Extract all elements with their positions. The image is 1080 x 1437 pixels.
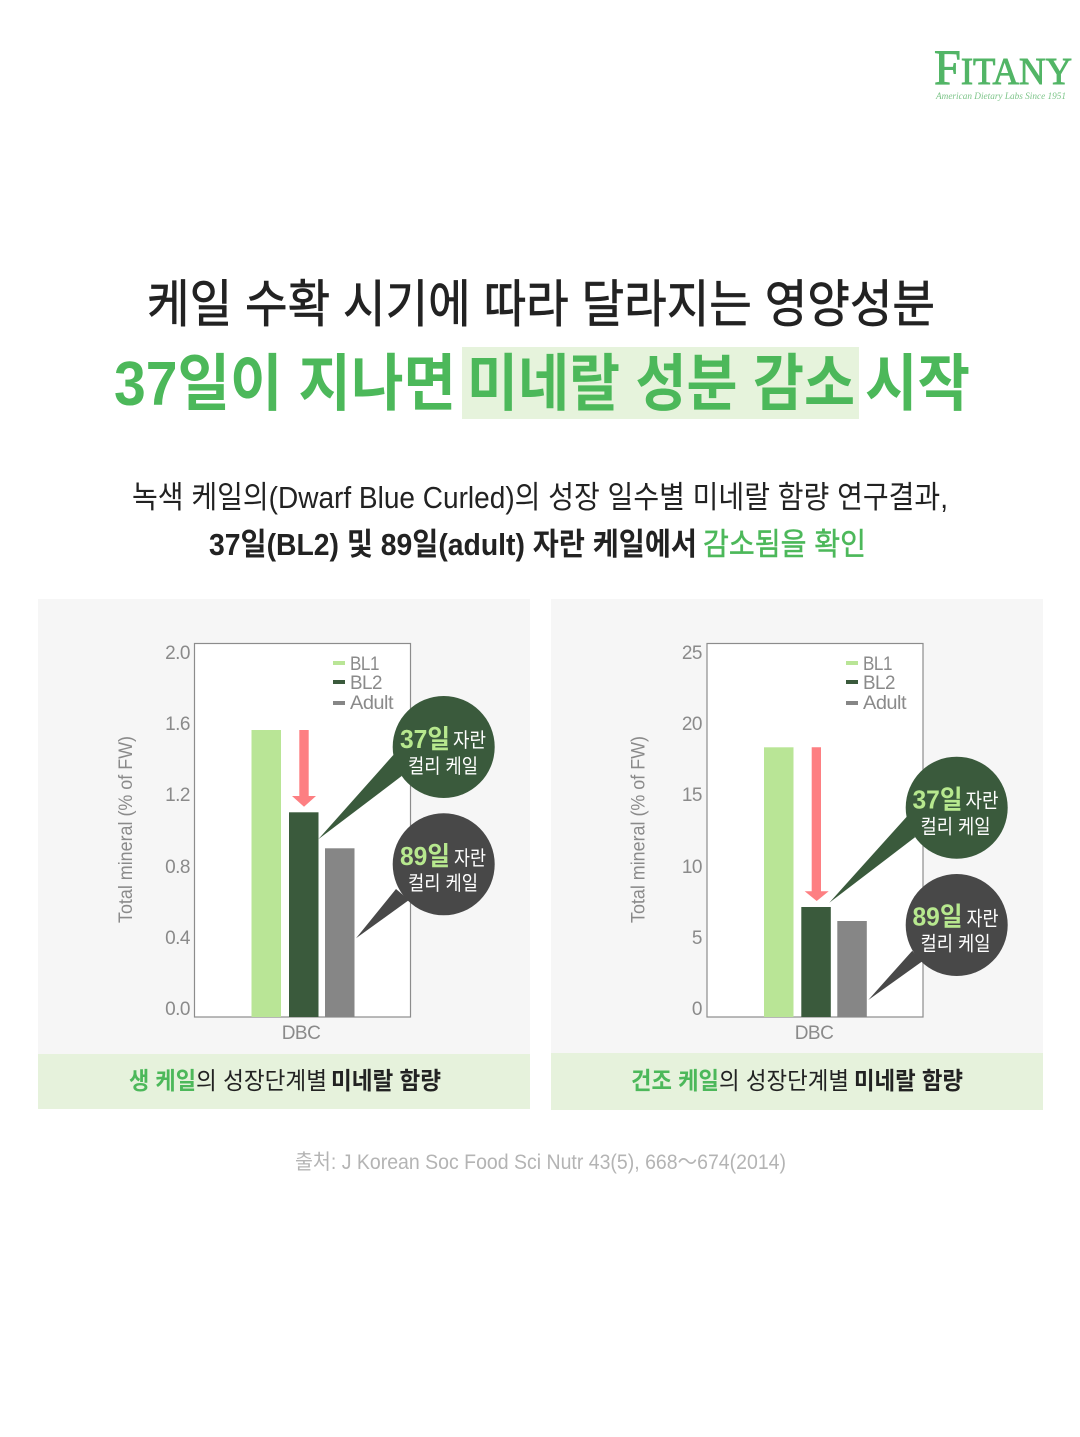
callout: 37 days xyxy=(318,696,495,839)
title line 2 with highlight: 37일이 지나면 xyxy=(114,350,456,419)
y axis ticks: 15 xyxy=(682,785,702,806)
y axis ticks: 0.0 xyxy=(165,999,190,1020)
y axis ticks: 0 xyxy=(692,999,702,1020)
caption: dried kale xyxy=(551,1053,1043,1110)
x axis label: DBC xyxy=(795,1023,833,1044)
chart frame xyxy=(194,644,410,1017)
y axis ticks: 25 xyxy=(682,643,702,664)
panel: fresh kale mineral chart xyxy=(38,599,530,1109)
arrow: decrease xyxy=(805,747,829,901)
y axis title: Total mineral (% of FW) xyxy=(628,736,650,923)
bar: BL1 xyxy=(252,730,281,1017)
y axis ticks: 20 xyxy=(682,714,702,735)
y axis title: Total mineral (% of FW) xyxy=(116,736,137,923)
legend: BL1 xyxy=(863,654,892,675)
caption: dried kale: 미네랄 함량 xyxy=(854,1068,963,1095)
chart frame xyxy=(707,644,923,1017)
source note: 출처: J Korean Soc Food Sci Nutr 43(5), 668～674(2014) xyxy=(295,1151,786,1174)
callout: 89 days: 자란 xyxy=(966,908,998,931)
y axis ticks: 0.8 xyxy=(165,857,190,878)
caption: dried kale: 의 성장단계별 xyxy=(719,1068,849,1095)
legend xyxy=(846,654,907,714)
caption: fresh kale: 의 성장단계별 xyxy=(196,1068,327,1095)
callout: 89 days: 컬리 케일 xyxy=(920,933,990,956)
bar: Adult xyxy=(837,921,867,1017)
caption: fresh kale: 생 케일 xyxy=(129,1068,196,1095)
callout: 89 days xyxy=(356,813,495,938)
y axis ticks xyxy=(682,643,702,1020)
callout: 89 days: 89일 xyxy=(912,902,962,932)
description line 2: 감소됨을 확인 xyxy=(703,527,866,562)
x axis label: DBC xyxy=(282,1023,320,1044)
legend: Adult xyxy=(863,693,907,714)
callout: 89 days: 89일 xyxy=(400,841,450,871)
callout: 89 days: 자란 xyxy=(454,847,486,870)
title line 2 with highlight: 시작 xyxy=(865,350,970,419)
callout: 37 days: 37일 xyxy=(912,785,962,815)
description line 2: 37일(BL2) 및 89일(adult) 자란 케일에서 xyxy=(209,527,697,562)
callout: 37 days: 자란 xyxy=(453,729,486,752)
caption: dried kale: 건조 케일 xyxy=(631,1068,719,1095)
legend: BL1 xyxy=(350,654,379,675)
description line 1: 녹색 케일의(Dwarf Blue Curled)의 성장 일수별 미네랄 함량 연구결과, xyxy=(132,480,948,515)
legend: BL2 xyxy=(863,673,895,694)
y axis ticks: 1.2 xyxy=(165,785,190,806)
callout: 37 days: 컬리 케일 xyxy=(408,755,478,778)
title line 1: 케일 수확 시기에 따라 달라지는 영양성분 xyxy=(147,276,935,333)
callout: 89 days: 컬리 케일 xyxy=(408,872,478,895)
legend: BL2 xyxy=(350,673,382,694)
callout: 37 days: 37일 xyxy=(400,724,450,754)
title line 2 with highlight: 미네랄 성분 감소 xyxy=(467,350,855,419)
logo: Fitany: American Dietary Labs Since 1951 xyxy=(935,92,1066,102)
y axis ticks: 0.4 xyxy=(165,928,191,949)
y axis ticks xyxy=(165,643,191,1020)
y axis ticks: 1.6 xyxy=(165,714,190,735)
bar: BL1 xyxy=(764,747,794,1017)
callout: 37 days: 자란 xyxy=(966,790,998,813)
caption: fresh kale: 미네랄 함량 xyxy=(331,1068,441,1095)
title line 2 with highlight xyxy=(114,347,970,419)
logo: Fitany: FITANY xyxy=(934,39,1072,95)
legend xyxy=(333,654,394,714)
bar: BL2 xyxy=(289,812,318,1017)
y axis ticks: 5 xyxy=(692,928,702,949)
legend: Adult xyxy=(350,693,394,714)
y axis ticks: 10 xyxy=(682,857,702,878)
caption: fresh kale xyxy=(38,1054,530,1109)
callout: 37 days: 컬리 케일 xyxy=(920,816,990,839)
y axis ticks: 2.0 xyxy=(165,643,190,664)
bar: Adult xyxy=(325,848,354,1017)
panel: dried kale mineral chart xyxy=(551,599,1043,1110)
bar: BL2 xyxy=(801,907,831,1017)
callout: 89 days xyxy=(868,874,1008,1000)
callout: 37 days xyxy=(829,757,1008,903)
arrow: decrease xyxy=(292,730,316,807)
